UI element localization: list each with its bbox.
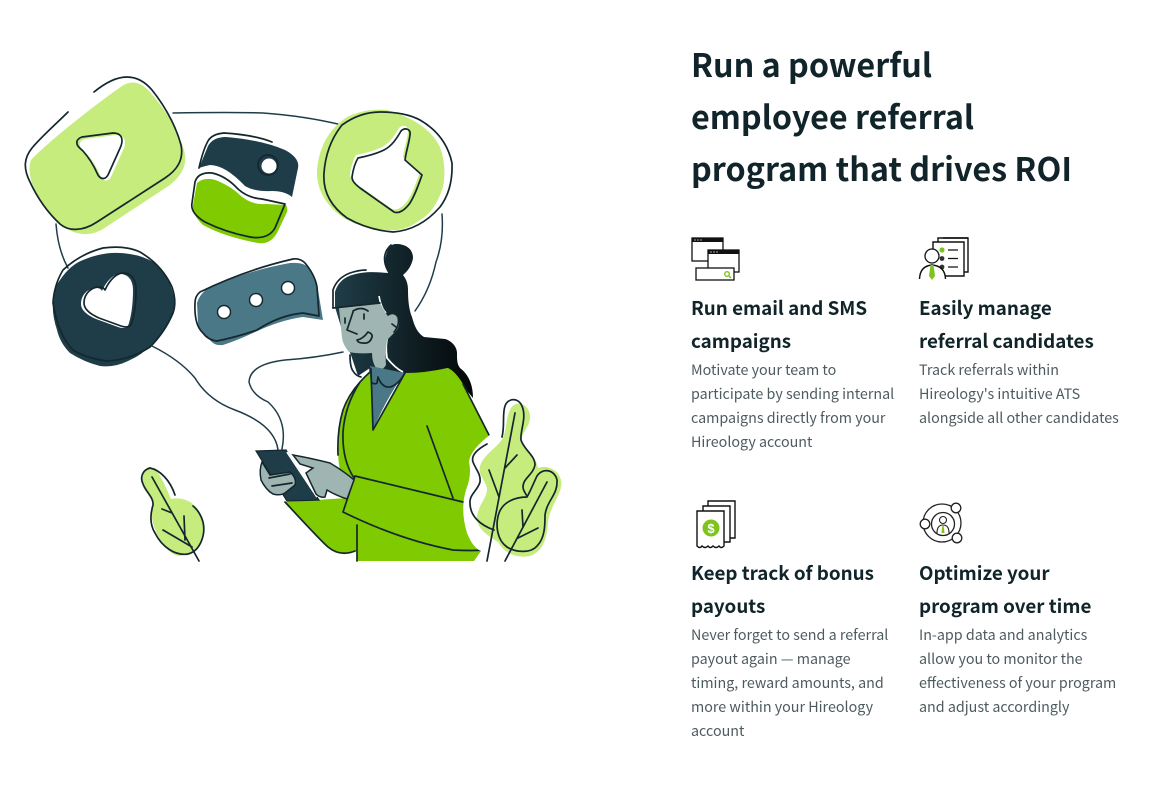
icon: browser windows with search [691,237,740,281]
left hand [260,462,295,495]
heading: optimize program: Optimize your [919,559,1050,586]
text: manage candidates: alongside all other candidates [919,406,1119,428]
text: email and SMS: participate by sending internal [691,382,894,404]
icon: camera split shape [192,133,298,243]
text: manage candidates: Hireology's intuitive ATS [919,382,1080,404]
text: email and SMS [691,358,894,452]
cuff [343,476,470,550]
heading: email and SMS [691,294,867,354]
icon: thumbs up [317,110,452,232]
text: bonus payouts: Never forget to send a referral [691,624,888,644]
large plants [463,395,570,561]
icon: play button [25,77,185,234]
icon: receipts with dollar: $ [707,521,715,536]
text: bonus payouts: payout again — manage [691,648,851,668]
text: optimize program: allow you to monitor the [919,648,1083,668]
text: bonus payouts: timing, reward amounts, and [691,672,884,692]
text: manage candidates [919,358,1119,428]
text: bonus payouts [691,624,888,740]
text: optimize program: In-app data and analytics [919,624,1087,644]
woman [256,244,490,561]
title: Run a powerful [691,41,932,87]
icon: candidate with checklist [918,237,969,280]
heading: optimize program [919,559,1091,619]
heading: bonus payouts: payouts [691,592,765,619]
title: program that drives ROI [691,145,1072,191]
phone [256,450,319,501]
heading: bonus payouts [691,559,874,619]
text: bonus payouts: account [691,720,744,740]
heading: email and SMS: campaigns [691,327,791,354]
right hand [293,455,354,499]
text: email and SMS: campaigns directly from your [691,406,885,428]
shirt [370,366,405,430]
heading: email and SMS: Run email and SMS [691,294,867,321]
text: manage candidates: Track referrals within [919,358,1059,380]
heading: manage candidates: Easily manage [919,294,1052,321]
text: optimize program: and adjust accordingly [919,696,1069,716]
sweater [285,368,490,561]
text: email and SMS: Hireology account [691,430,812,452]
title [691,41,1072,191]
icon: receipts with dollar [696,500,736,548]
sweater linework [285,369,490,561]
text: optimize program: effectiveness of your program [919,672,1116,692]
connector lines [56,112,442,450]
small plant [142,467,204,561]
heading: bonus payouts: Keep track of bonus [691,559,874,586]
collar [370,368,405,387]
text: bonus payouts: more within your Hireology [691,696,873,716]
heading: manage candidates [919,294,1094,354]
hair [333,244,473,398]
face [333,303,399,369]
icon: heart [53,247,175,366]
icon: speech bubble [195,259,323,345]
heading: manage candidates: referral candidates [919,327,1094,354]
text: optimize program [919,624,1116,716]
text: email and SMS: Motivate your team to [691,358,836,380]
title: employee referral [691,93,974,139]
illustration: woman with phone and floating social icons [24,76,562,562]
icon: orbit with person [920,502,962,544]
heading: optimize program: program over time [919,592,1091,619]
